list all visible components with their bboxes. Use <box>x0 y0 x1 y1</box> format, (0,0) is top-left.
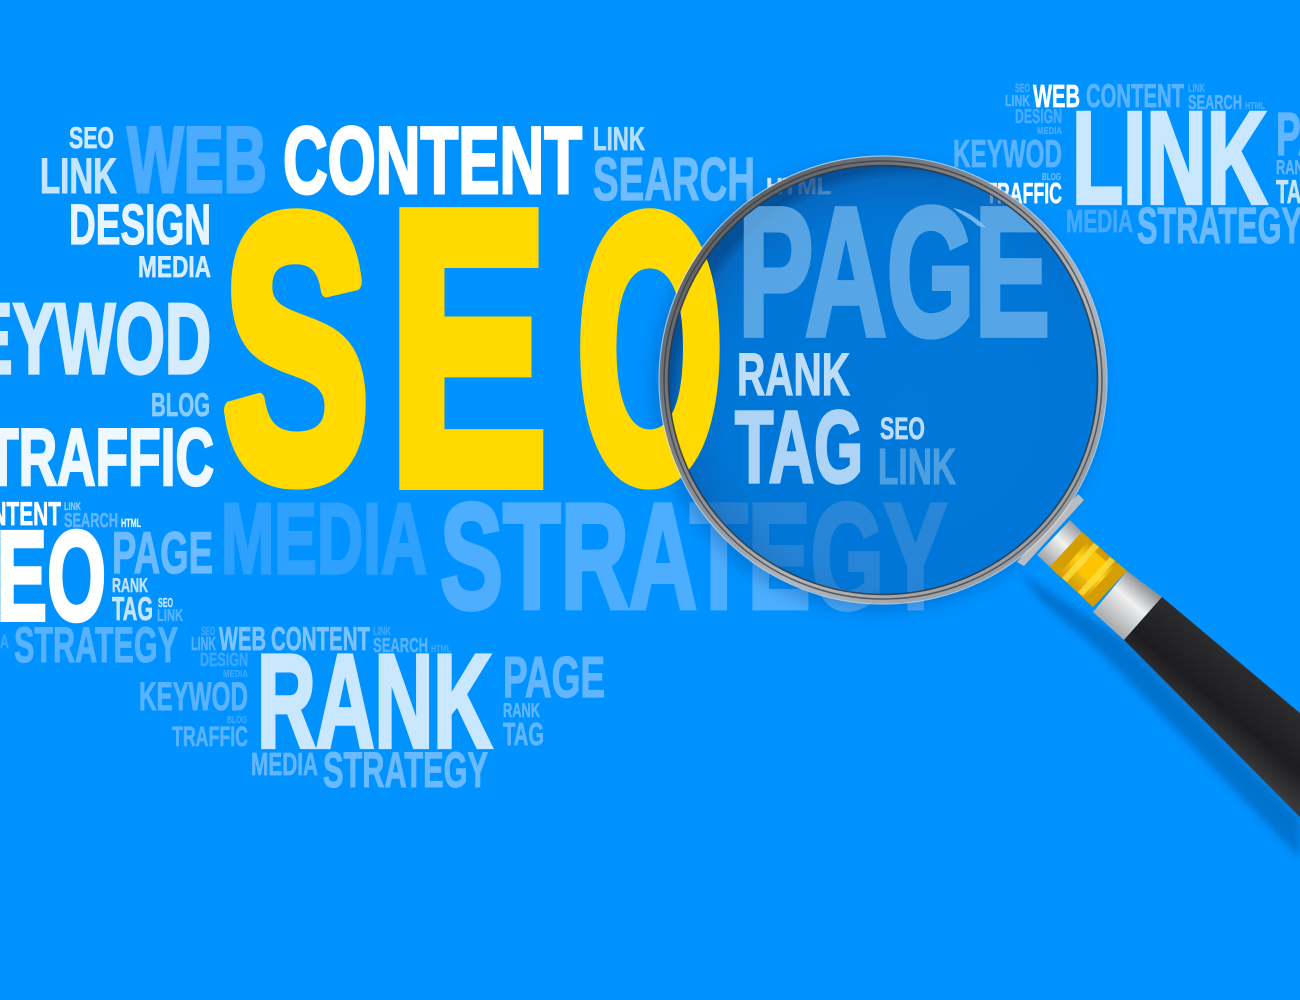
magnified word: seo: SEO <box>880 411 925 446</box>
word: strategy: STRATEGY <box>440 472 947 640</box>
word: LINK <box>373 624 391 638</box>
word: WEB <box>1033 78 1080 114</box>
word: KEYWOD <box>139 675 248 719</box>
letter E: E <box>389 132 547 563</box>
word: rank: RANK <box>257 628 492 776</box>
word: KEYWOD <box>953 133 1062 176</box>
word: BLOG <box>1042 172 1061 183</box>
word: MEDIA <box>1066 203 1133 239</box>
word: LINK <box>64 501 81 513</box>
word: BLOG <box>151 386 210 423</box>
letter S: S <box>223 140 369 556</box>
lens ring <box>664 161 1102 599</box>
word: SEARCH <box>64 510 118 532</box>
magnified word: rank: RANK <box>737 341 850 408</box>
word: TRAFFIC <box>986 178 1062 210</box>
word: TAG <box>503 716 544 752</box>
lens glare <box>953 208 986 228</box>
magnifying glass handle <box>1037 520 1300 817</box>
word: DESIGN <box>200 650 248 671</box>
word: LINK <box>40 148 117 204</box>
word: SEARCH <box>373 635 428 657</box>
black handle <box>1124 597 1300 817</box>
word: CONTENT <box>1086 77 1184 114</box>
word: LINK <box>191 634 216 655</box>
magnified word: page: PAGE <box>738 169 1050 374</box>
word: WEB <box>127 107 267 212</box>
lens shadow <box>652 160 1104 612</box>
gold collar <box>1050 532 1127 607</box>
word cloud: bottom centre <box>139 620 605 798</box>
word: HTML <box>431 644 451 655</box>
word: HTML <box>1245 101 1265 112</box>
word: SEARCH <box>1188 92 1242 114</box>
word: LINK <box>1188 81 1205 95</box>
word: STRATEGY <box>323 742 488 798</box>
word: HTML <box>121 516 141 530</box>
word: STRATEGY <box>14 617 178 673</box>
silver ferrule <box>1093 571 1162 640</box>
word: PAGE <box>503 645 605 710</box>
magnified word: link: LINK <box>878 438 956 495</box>
word: BLOG <box>227 715 247 726</box>
word: SEARCH <box>593 145 755 213</box>
lens tint <box>669 166 1097 594</box>
word: TAG <box>112 590 153 627</box>
word: SEO <box>69 122 114 155</box>
seo headline letters <box>223 132 547 563</box>
word: MEDIA <box>221 483 427 595</box>
infographic canvas <box>0 84 1300 857</box>
word: RANK <box>112 575 148 597</box>
word: content: CONTENT <box>283 108 582 214</box>
silver neck <box>1037 520 1082 567</box>
word: LINK <box>593 120 645 157</box>
ring edges <box>659 156 1107 604</box>
word: SEO <box>158 595 173 610</box>
lens bracket <box>1017 494 1084 566</box>
word: LINK <box>157 606 183 625</box>
word: LINK <box>1005 93 1030 110</box>
word: CONTENT <box>271 620 370 657</box>
word: RANK <box>503 700 540 722</box>
word: PAGE <box>112 520 213 586</box>
word: MEDIA <box>223 669 248 680</box>
word: SEO <box>201 624 215 638</box>
word: TRAFFIC <box>172 721 248 752</box>
handle shadow <box>1020 572 1300 858</box>
word: MEDIA <box>138 251 211 284</box>
word: MEDIA <box>1037 126 1062 137</box>
magnifying lens <box>577 140 1107 604</box>
word cloud: main left <box>0 107 947 640</box>
word: HTML <box>766 173 831 199</box>
magnified word: tag: TAG <box>735 390 863 504</box>
word: DESIGN <box>1015 106 1062 128</box>
word cloud: top right <box>953 77 1300 254</box>
word: SEO <box>1015 81 1030 95</box>
word: MEDIA <box>251 746 318 782</box>
seo headline letter O: O <box>577 140 723 556</box>
word: WEB <box>219 620 266 657</box>
magnified words <box>734 204 1048 485</box>
word: DESIGN <box>69 193 211 257</box>
